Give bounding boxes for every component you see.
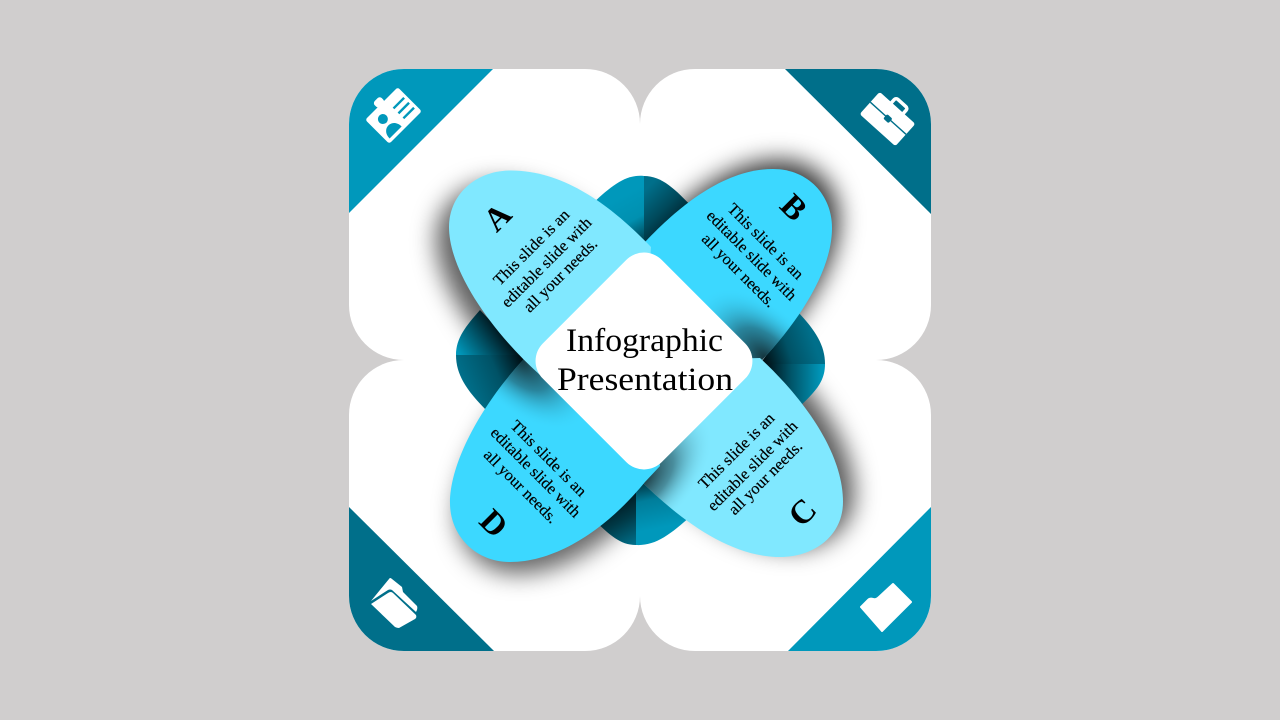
letter A: A bbox=[477, 197, 519, 239]
corner banner: bottom right bbox=[788, 507, 931, 651]
petal shadows bbox=[436, 160, 854, 574]
text block D: This slide is an bbox=[507, 417, 590, 500]
text block D: all your needs. bbox=[480, 447, 560, 527]
panel: rounded quadrants bbox=[349, 69, 931, 651]
back petal: top bbox=[590, 176, 695, 245]
center diamond bbox=[525, 242, 763, 480]
title bbox=[557, 323, 733, 398]
text block C: all your needs. bbox=[726, 438, 806, 519]
text block A: editable slide with bbox=[498, 214, 595, 311]
corner banner: top left bbox=[349, 69, 493, 213]
title: Presentation bbox=[557, 362, 733, 398]
icon: briefcase bbox=[860, 87, 920, 146]
petal A bbox=[449, 170, 651, 375]
text block C: editable slide with bbox=[704, 418, 801, 515]
text block C: This slide is an bbox=[695, 410, 778, 493]
petal B bbox=[644, 169, 832, 361]
corner banner: bottom left bbox=[349, 507, 494, 651]
text block A: all your needs. bbox=[521, 236, 601, 316]
text block A: This slide is an bbox=[490, 206, 573, 289]
corner banner: top right bbox=[785, 69, 931, 214]
text block B: This slide is an bbox=[724, 200, 807, 283]
icon: id card bbox=[361, 83, 422, 144]
back petal: right bbox=[760, 312, 825, 408]
icon: open folder bbox=[371, 578, 417, 628]
back petal: left bbox=[456, 310, 528, 412]
icon: closed folder bbox=[861, 584, 911, 631]
text block B: all your needs. bbox=[698, 231, 778, 311]
back petal: bottom bbox=[594, 478, 692, 545]
text block D: editable slide with bbox=[487, 424, 584, 521]
letter C: C bbox=[782, 492, 824, 534]
petal D bbox=[450, 358, 660, 562]
petal C bbox=[640, 358, 843, 557]
letter B: B bbox=[773, 187, 814, 228]
text block B: editable slide with bbox=[703, 207, 800, 304]
letter D: D bbox=[472, 503, 514, 545]
title: Infographic bbox=[566, 323, 723, 359]
